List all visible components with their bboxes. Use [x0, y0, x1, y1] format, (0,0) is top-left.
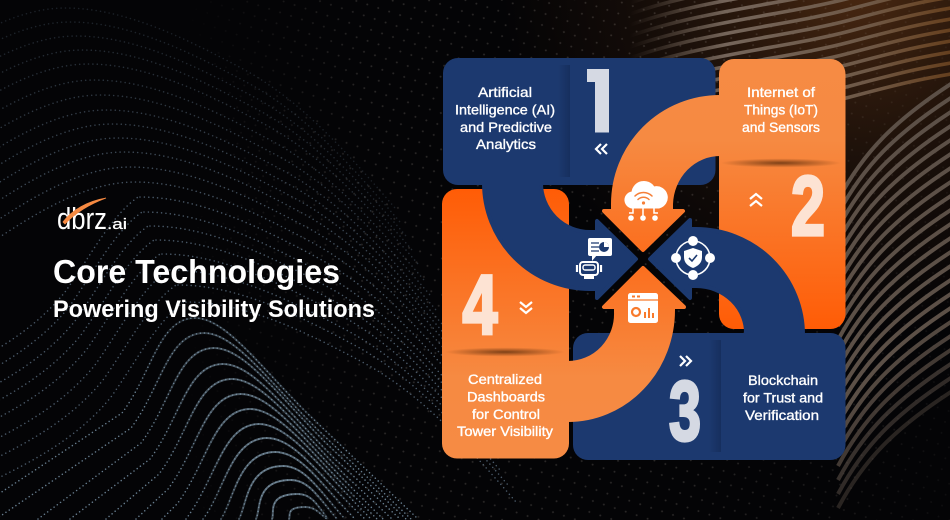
arrow 1: navy from panel 1 [484, 183, 636, 298]
number 1: 1 [577, 53, 627, 153]
label: blockchain: Verification [745, 407, 819, 423]
number 3: 3 [669, 364, 701, 458]
label: centralized dashboards [457, 371, 553, 439]
label: internet of things: Things (IoT) [744, 102, 818, 118]
logo: dbrz.ai: .ai [107, 216, 127, 233]
icon: cloud with wifi and nodes [625, 181, 667, 221]
label: internet of things: and Sensors [742, 119, 820, 135]
panel 3: blockchain [573, 333, 846, 460]
label: internet of things [742, 84, 820, 135]
label: blockchain [743, 372, 823, 423]
title: Core Technologies [53, 253, 340, 290]
icon: robot with chart bubble [577, 238, 612, 279]
label: artificial intelligence: Intelligence (AI) [455, 102, 555, 118]
chevrons down [520, 302, 532, 313]
number 1 [587, 69, 609, 132]
chevrons up [750, 194, 762, 206]
label: internet of things: Internet of [747, 84, 815, 100]
chevrons right [680, 356, 691, 366]
label: artificial intelligence: Artificial [478, 84, 532, 100]
arrow 3: navy from panel 3 [650, 220, 803, 335]
arrow 2: orange from panel 2 [604, 97, 720, 250]
label: artificial intelligence: and Predictive [460, 119, 552, 135]
panel 4: centralized dashboards [442, 189, 569, 458]
icon: dashboard window [628, 293, 658, 323]
subtitle: Powering Visibility Solutions [53, 296, 375, 323]
label: artificial intelligence [455, 84, 555, 152]
label: artificial intelligence: Analytics [476, 136, 536, 152]
label: centralized dashboards: Centralized [468, 371, 542, 387]
panel 1: artificial intelligence [443, 53, 716, 185]
arrow 4: orange from panel 4 [568, 268, 684, 420]
label: centralized dashboards: for Control [472, 406, 540, 422]
label: centralized dashboards: Tower Visibility [457, 423, 553, 439]
number 4: 4 [462, 258, 498, 352]
label: blockchain: for Trust and [743, 390, 823, 406]
number 2: 2 [791, 159, 825, 253]
icon: shield with network [671, 236, 715, 280]
panel 2: internet of things [719, 59, 846, 329]
logo: dbrz.ai: dbrz [57, 201, 107, 236]
label: blockchain: Blockchain [748, 372, 818, 388]
label: centralized dashboards: Dashboards [467, 388, 545, 404]
chevrons left [596, 144, 607, 154]
